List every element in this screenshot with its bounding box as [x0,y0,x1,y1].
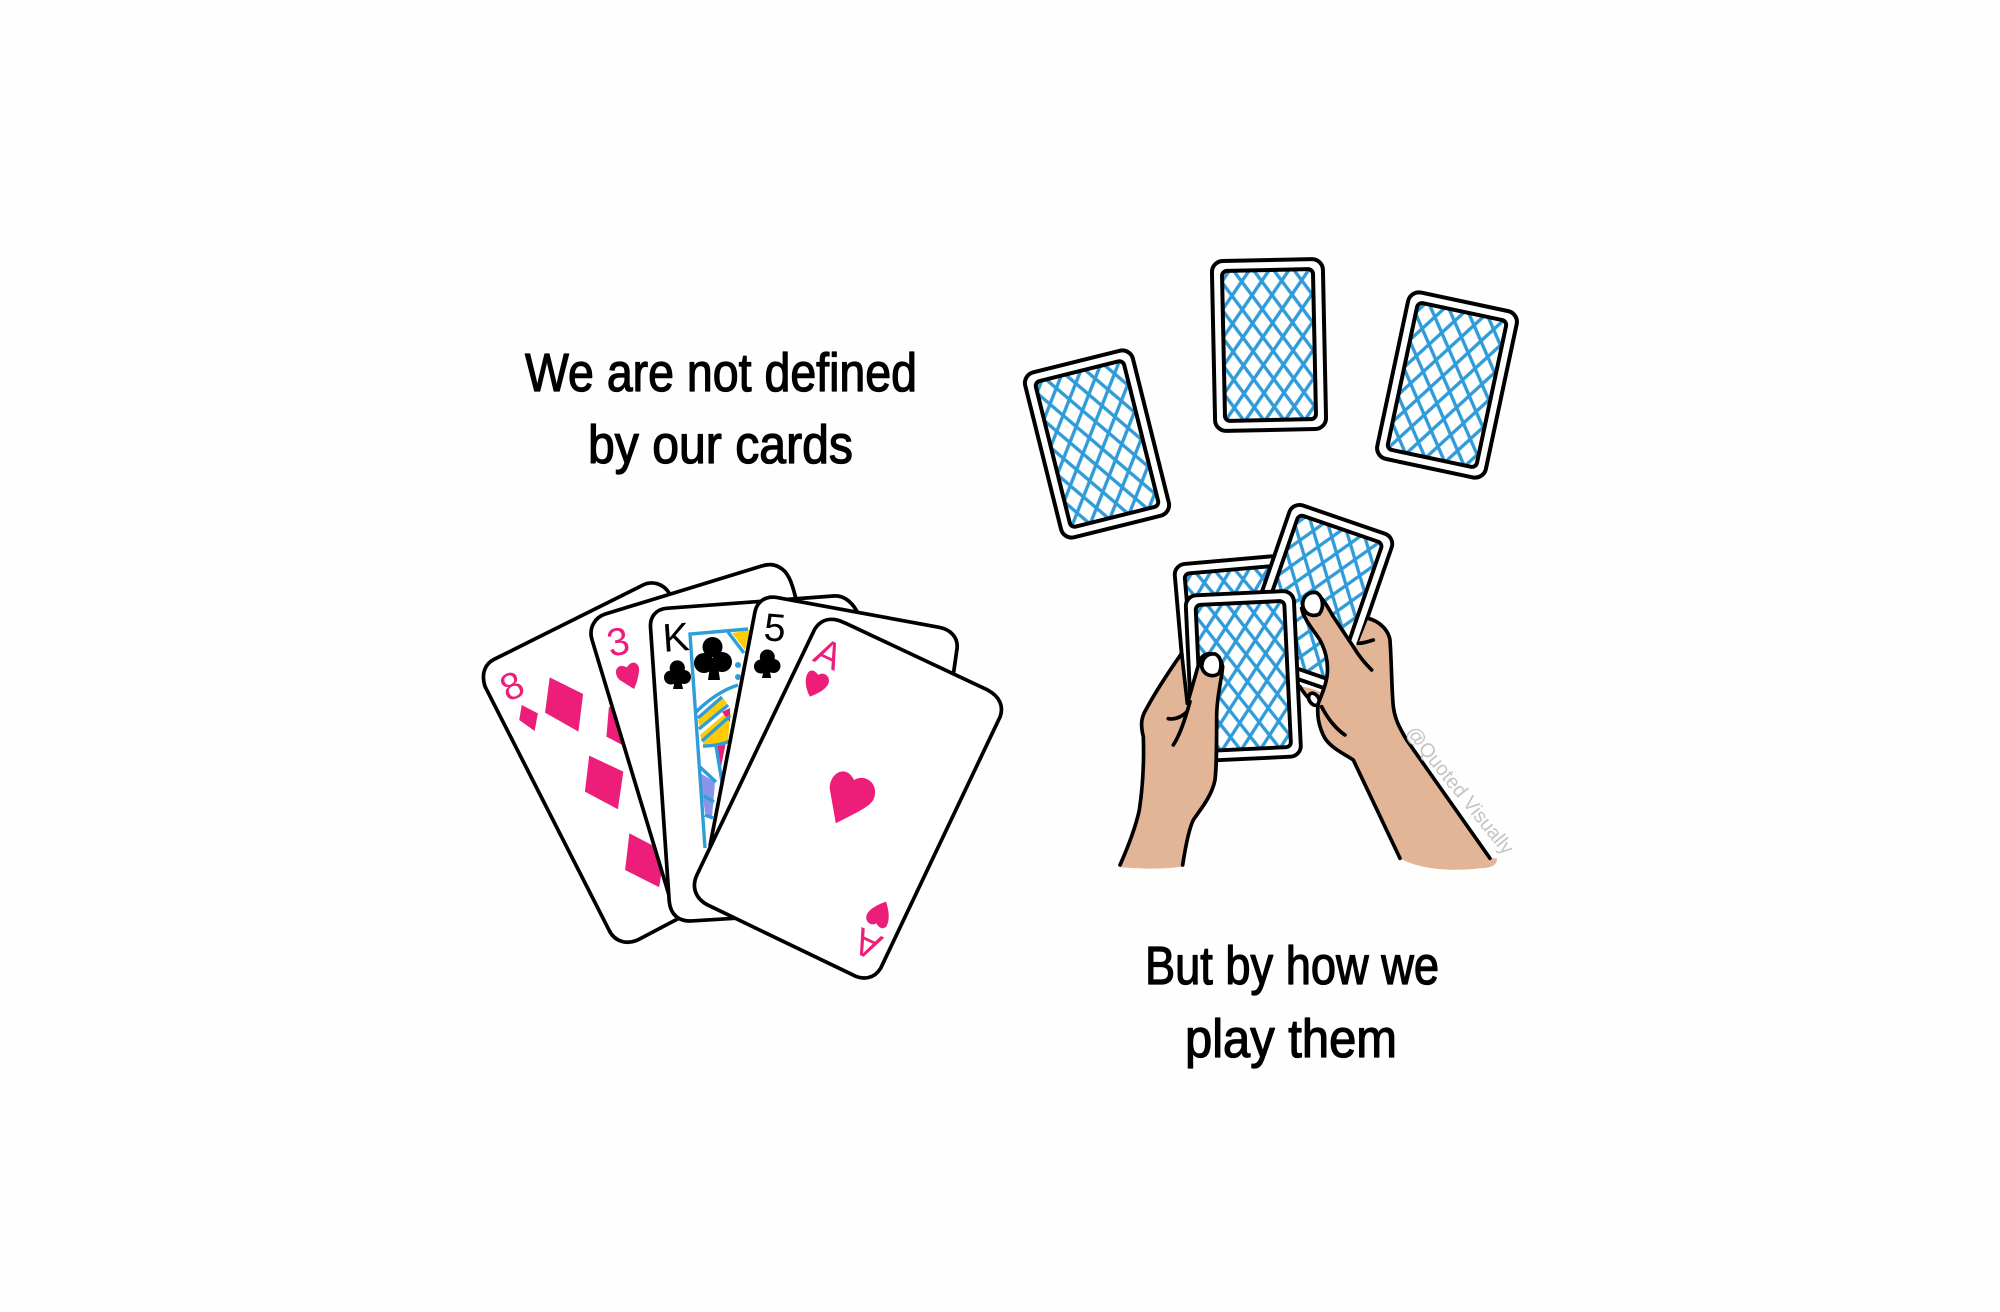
watermark: @Quoted Visually [1401,722,1518,859]
card: eight of diamonds: 8 [494,663,531,710]
card: ace of hearts: A [808,630,849,679]
card: five of clubs: 5 [762,606,788,651]
left hand [1120,653,1223,869]
held card: front [1185,591,1301,761]
card: eight of diamonds [483,583,679,942]
heading: but by how we play them [1145,936,1439,1069]
card: three of hearts: 3 [603,619,633,666]
heading: but by how we play them: play them [1185,1009,1397,1069]
card: three of hearts [591,565,796,898]
heading: we are not defined by our cards: We are not defined [525,343,917,403]
thrown card back: right [1375,290,1519,480]
heading: but by how we play them: But by how we [1145,936,1439,996]
held card: back right [1239,502,1395,694]
thrown card back: centre [1212,259,1326,431]
hand of five playing cards [483,565,1001,978]
card: king of clubs: K [661,615,691,661]
card: king of clubs [650,596,857,921]
card: five of clubs [710,597,957,845]
lower finger under card [1300,687,1323,707]
king artwork [690,629,750,848]
small club pip [664,660,691,689]
hands holding three cards [1120,502,1497,870]
heading: we are not defined by our cards [525,343,917,475]
card: ace of hearts [694,619,1001,978]
card: ace of hearts: A [847,919,888,968]
thrown card back: left [1023,348,1171,540]
heading: we are not defined by our cards: by our cards [588,415,853,475]
large club pip [694,637,732,680]
held card: back left [1174,555,1296,730]
right hand [1302,592,1497,870]
